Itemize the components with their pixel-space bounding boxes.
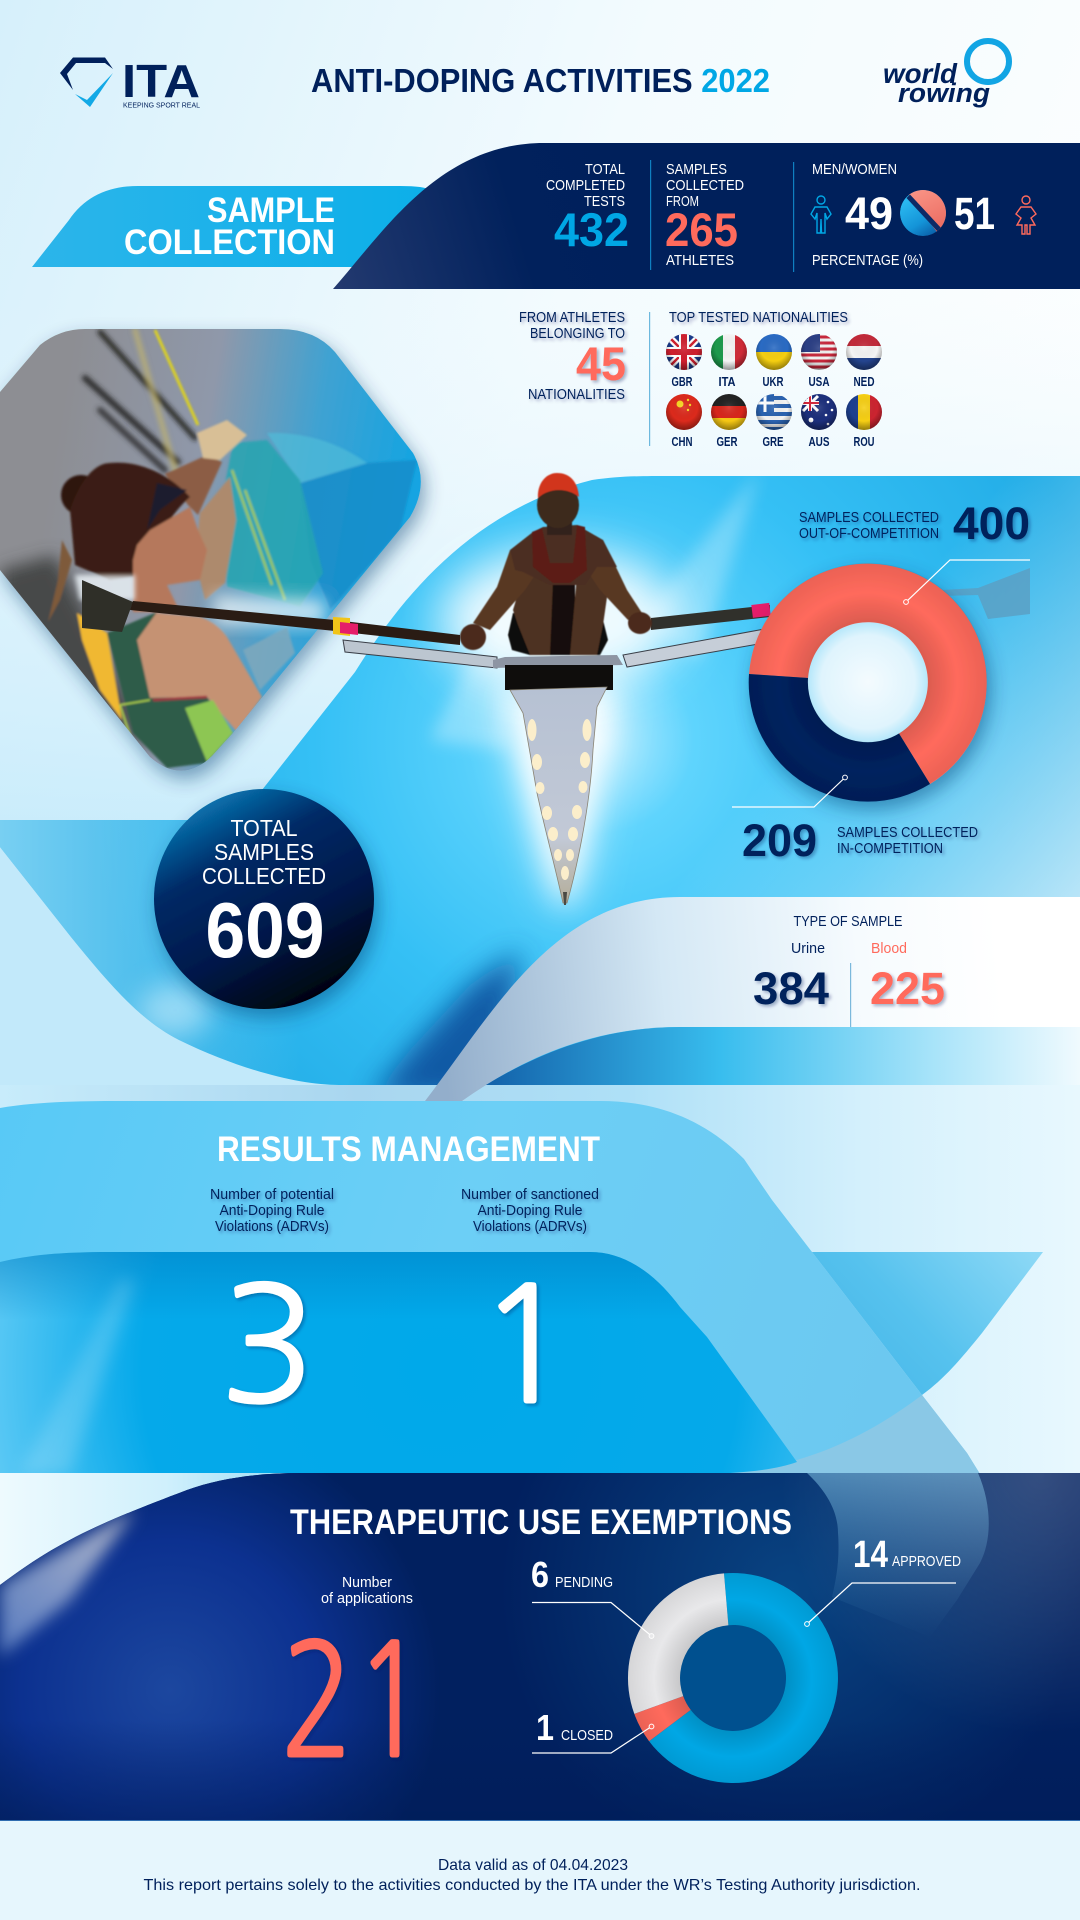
stat: men women percentage	[811, 161, 1036, 269]
heading: sample collection: SAMPLE	[207, 191, 335, 230]
callout: samples out-of-competition: 400	[953, 498, 1030, 549]
callout: 6 pending: 6	[531, 1554, 549, 1595]
stat: 45 nationalities: FROM ATHLETES	[519, 309, 625, 326]
footer: This report pertains solely to the activities conducted by the ITA under the WR’s Testing Authority jurisdiction.	[144, 1877, 920, 1894]
photo: rower with oar in hexagon	[0, 320, 430, 780]
value: urine 384: 384	[753, 963, 829, 1014]
stat: samples collected from athletes: ATHLETES	[666, 252, 734, 269]
stat: men women percentage: 49	[845, 188, 893, 239]
flag: CHN	[666, 394, 702, 449]
flag: GER	[711, 394, 747, 449]
hair	[60, 474, 88, 512]
logo: World Rowing	[883, 41, 1009, 108]
label: potential ADRVs: Violations (ADRVs)	[215, 1218, 329, 1235]
flag: GRE: GRE	[762, 434, 784, 449]
flag: UKR	[756, 334, 792, 389]
stat: 45 nationalities: BELONGING TO	[530, 325, 625, 342]
stat: total completed tests	[546, 161, 629, 256]
callout: total samples collected: COLLECTED	[202, 863, 326, 889]
oar: right	[651, 568, 1030, 630]
panel: type of sample	[425, 897, 1080, 1101]
sunglasses	[147, 483, 187, 530]
panel: sample stats	[333, 143, 1080, 289]
logo: ITA: ITA	[122, 55, 200, 107]
value: 21 applications: 21	[280, 1623, 428, 1779]
other arm	[243, 627, 295, 690]
flag: UKR: UKR	[762, 374, 784, 389]
flag: GBR	[666, 334, 702, 389]
stat: 45 nationalities	[519, 309, 626, 403]
stat: 45 nationalities: 45	[576, 337, 626, 390]
label: number of applications	[321, 1574, 413, 1607]
lighter upper shape	[0, 1101, 980, 1474]
label: sanctioned ADRVs: Anti-Doping Rule	[478, 1202, 582, 1219]
stat: men women percentage: 51	[954, 188, 995, 239]
stat: total completed tests: COMPLETED	[546, 177, 625, 194]
label: urine: Urine	[791, 940, 825, 957]
label: potential ADRVs: Number of potential	[210, 1186, 334, 1203]
stat: total completed tests: TESTS	[584, 193, 625, 210]
panel: therapeutic use exemptions	[0, 1473, 1080, 1821]
callout: 6 pending	[531, 1554, 654, 1638]
callout: samples in-competition: 209	[742, 815, 817, 866]
callout: total samples collected: 609	[206, 886, 324, 974]
stat: samples collected from athletes	[665, 161, 744, 269]
segment: out-of-competition	[749, 564, 987, 784]
callout: 1 closed: 1	[536, 1707, 554, 1748]
value: sanctioned 1: 1	[477, 1266, 573, 1426]
darker lower shape	[0, 1252, 797, 1474]
flag: ROU: ROU	[854, 434, 874, 449]
callout: samples out-of-competition	[799, 498, 1030, 604]
illustration: rower silhouette in boat	[82, 473, 1030, 905]
callout: samples in-competition: IN-COMPETITION	[837, 840, 943, 857]
panel: rower backdrop	[0, 470, 1080, 1100]
title: ANTI-DOPING ACTIVITIES 2022	[311, 62, 770, 99]
flag: NED	[846, 334, 882, 389]
shoulder and back	[137, 613, 262, 732]
callout: 14 approved: APPROVED	[892, 1553, 961, 1570]
segment: in-competition	[749, 674, 930, 802]
chart: TUE donut	[628, 1573, 838, 1783]
logo: World Rowing: rowing	[898, 78, 991, 108]
segment: pending	[628, 1573, 728, 1714]
stat: men women percentage: PERCENTAGE (%)	[812, 252, 923, 269]
right triangle shape	[812, 1252, 1043, 1395]
icon: man	[811, 196, 831, 233]
stat: samples collected from athletes: SAMPLES	[666, 161, 727, 178]
value: blood 225: 225	[870, 963, 945, 1014]
callout: 14 approved	[805, 1534, 961, 1626]
heading: top tested nationalities: TOP TESTED NATIONALITIES	[669, 309, 848, 326]
boat cover	[300, 460, 417, 610]
label: potential ADRVs: Anti-Doping Rule	[220, 1202, 324, 1219]
flag: USA	[801, 334, 837, 389]
heading: sample collection	[124, 191, 335, 262]
flag: ROU	[846, 394, 882, 449]
callout: 14 approved: 14	[853, 1534, 888, 1576]
label: number of applications: of applications	[321, 1590, 413, 1607]
footer	[0, 1821, 1080, 1920]
callout: samples in-competition	[732, 775, 978, 866]
panel: sample collection tab	[32, 186, 430, 267]
stat: samples collected from athletes: 265	[665, 203, 738, 256]
footer: Data valid as of 04.04.2023	[438, 1857, 628, 1874]
lighter area beneath the curve	[700, 1395, 980, 1474]
segment: approved	[649, 1573, 838, 1783]
arm and hand	[195, 477, 236, 600]
translucent swoosh over navy	[807, 1473, 989, 1637]
riggers and deck	[343, 628, 770, 690]
stat: samples collected from athletes: FROM	[666, 193, 699, 210]
logo: ITA	[60, 55, 200, 110]
heading: type of sample: TYPE OF SAMPLE	[794, 913, 902, 930]
label: sanctioned ADRVs: Number of sanctioned	[461, 1186, 599, 1203]
flag: GER: GER	[716, 434, 738, 449]
label: potential ADRVs	[210, 1186, 334, 1235]
singlet	[77, 613, 122, 720]
flags: top tested nationalities	[666, 334, 882, 449]
flag: AUS	[801, 394, 837, 449]
callout: 1 closed	[532, 1707, 654, 1753]
stat: 45 nationalities: NATIONALITIES	[528, 386, 625, 403]
logo: ITA: KEEPING SPORT REAL	[123, 100, 200, 110]
flag: ITA: ITA	[718, 374, 736, 389]
label: number of applications: Number	[342, 1574, 392, 1591]
heading: therapeutic use exemptions: THERAPEUTIC USE EXEMPTIONS	[290, 1503, 792, 1542]
panel: results management	[0, 1101, 1043, 1474]
callout: total samples collected: SAMPLES	[214, 839, 314, 865]
callout: samples in-competition: SAMPLES COLLECTED	[837, 824, 978, 841]
flag: NED: NED	[854, 374, 874, 389]
stat: total completed tests: TOTAL	[585, 161, 625, 178]
value: potential 3: 3	[220, 1266, 316, 1426]
label: sanctioned ADRVs	[461, 1186, 599, 1235]
flag: ITA	[711, 334, 747, 389]
shadow in lower left of photo	[0, 555, 150, 757]
icon: woman	[1016, 196, 1036, 234]
heading: sample collection: COLLECTION	[124, 223, 335, 262]
stat: men women percentage: MEN/WOMEN	[812, 161, 897, 178]
callout: total samples collected	[154, 789, 374, 1009]
callout: samples out-of-competition: OUT-OF-COMPETITION	[799, 525, 939, 542]
chart: out-of-competition vs in-competition donut	[749, 563, 987, 802]
label: sanctioned ADRVs: Violations (ADRVs)	[473, 1218, 587, 1235]
icon: gender ball	[900, 190, 946, 236]
stat: total completed tests: 432	[554, 203, 629, 256]
segment: closed	[634, 1696, 691, 1741]
hull	[510, 687, 607, 905]
fade below the head	[75, 575, 135, 600]
logo: World Rowing: world	[883, 58, 958, 89]
flag: AUS: AUS	[808, 434, 830, 449]
flag: USA: USA	[808, 374, 830, 389]
oar: left	[82, 580, 460, 645]
heading: results management: RESULTS MANAGEMENT	[217, 1130, 600, 1169]
flag: CHN: CHN	[672, 434, 692, 449]
flag: GBR: GBR	[672, 374, 693, 389]
stat: samples collected from athletes: COLLECTED	[666, 177, 744, 194]
face and neck	[133, 507, 207, 612]
callout: 6 pending: PENDING	[555, 1574, 613, 1591]
blurred oar racks	[85, 330, 195, 470]
callout: samples out-of-competition: SAMPLES COLLECTED	[799, 509, 939, 526]
callout: 1 closed: CLOSED	[561, 1727, 613, 1744]
athlete	[460, 473, 652, 655]
label: blood: Blood	[871, 940, 907, 957]
flag: GRE	[756, 394, 792, 449]
callout: total samples collected: TOTAL	[230, 815, 298, 841]
